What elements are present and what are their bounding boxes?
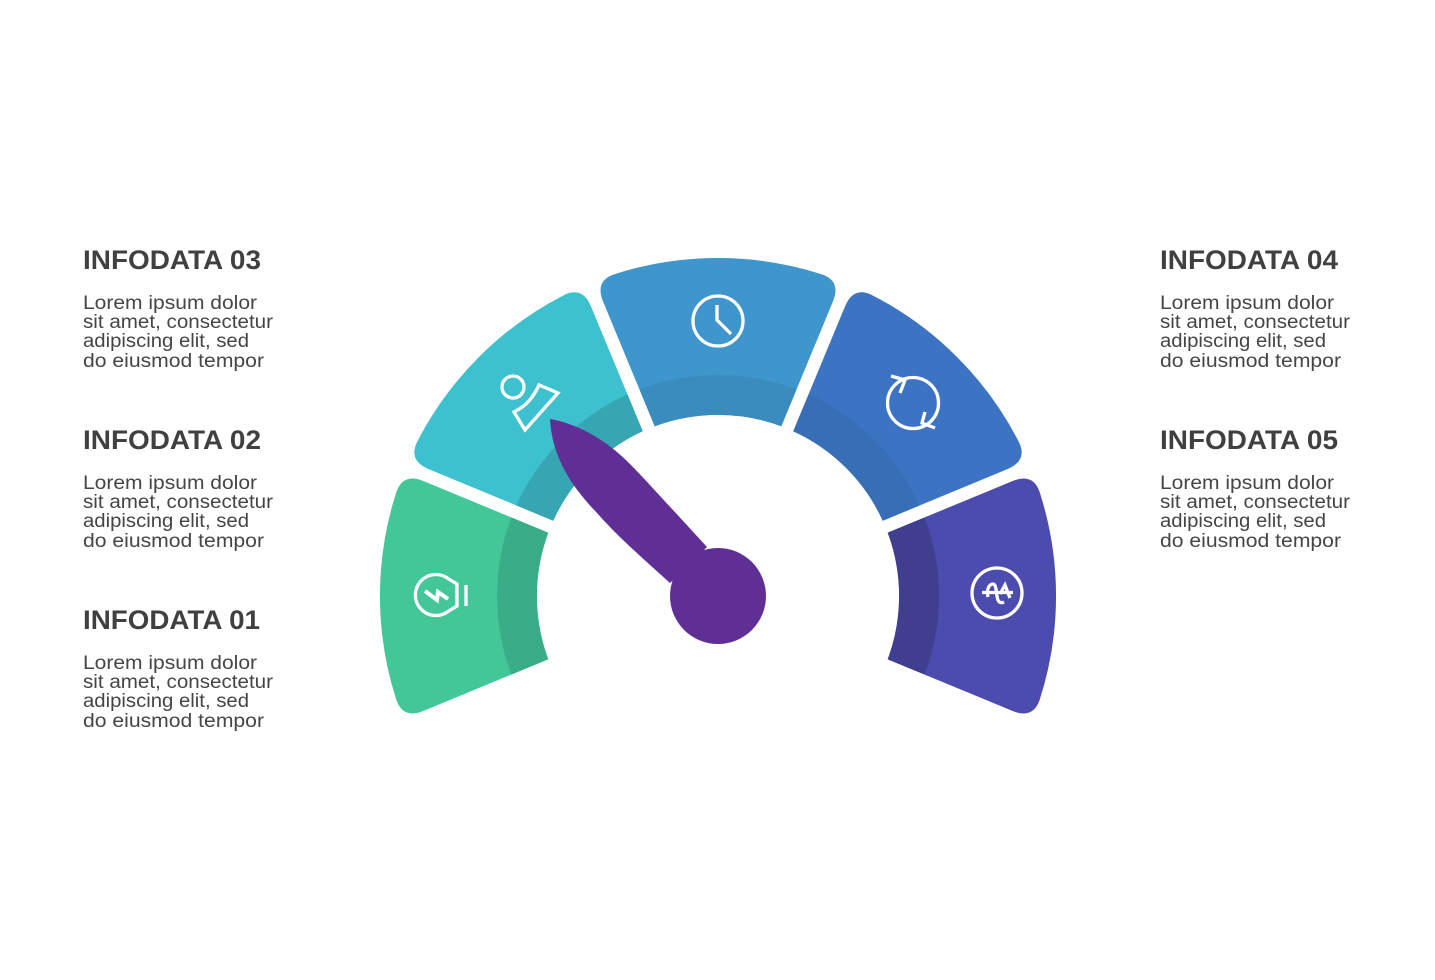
icon: person xyxy=(502,376,558,430)
gauge segment 2: teal xyxy=(396,274,681,559)
text block: infodata 01: adipiscing elit, sed xyxy=(83,691,249,712)
text block: infodata 05: sit amet, consectetur xyxy=(1160,492,1351,513)
text block: infodata 02: sit amet, consectetur xyxy=(83,492,274,513)
text block: infodata 05: INFODATA 05 xyxy=(1160,425,1338,455)
text block: infodata 01: Lorem ipsum dolor xyxy=(83,653,258,674)
gauge segment 4: royal blue xyxy=(755,274,1040,559)
text block: infodata 01: do eiusmod tempor xyxy=(83,711,265,732)
text block: infodata 03: Lorem ipsum dolor xyxy=(83,293,258,314)
text block: infodata 04: sit amet, consectetur xyxy=(1160,312,1351,333)
text block: infodata 03: adipiscing elit, sed xyxy=(83,331,249,352)
text block: infodata 05: Lorem ipsum dolor xyxy=(1160,473,1335,494)
text block: infodata 04 xyxy=(1160,245,1351,372)
text block: infodata 02: adipiscing elit, sed xyxy=(83,511,249,532)
gauge segment 3: blue xyxy=(601,258,835,426)
text block: infodata 01: sit amet, consectetur xyxy=(83,672,274,693)
text block: infodata 02: Lorem ipsum dolor xyxy=(83,473,258,494)
needle xyxy=(550,419,766,644)
text block: infodata 03: do eiusmod tempor xyxy=(83,351,265,372)
text block: infodata 02: INFODATA 02 xyxy=(83,425,261,455)
icon: refresh arrows xyxy=(888,376,938,428)
text block: infodata 04: INFODATA 04 xyxy=(1160,245,1338,275)
text block: infodata 03 xyxy=(83,245,274,372)
text block: infodata 03: sit amet, consectetur xyxy=(83,312,274,333)
text block: infodata 04: do eiusmod tempor xyxy=(1160,351,1342,372)
text block: infodata 05 xyxy=(1160,425,1351,552)
icon: clock xyxy=(693,296,743,346)
text block: infodata 02: do eiusmod tempor xyxy=(83,531,265,552)
text block: infodata 04: adipiscing elit, sed xyxy=(1160,331,1326,352)
text block: infodata 04: Lorem ipsum dolor xyxy=(1160,293,1335,314)
icon: light bulb xyxy=(415,574,466,616)
icon: dollar coin xyxy=(972,568,1022,618)
text block: infodata 02 xyxy=(83,425,274,552)
text block: infodata 05: adipiscing elit, sed xyxy=(1160,511,1326,532)
text block: infodata 01: INFODATA 01 xyxy=(83,605,260,635)
gauge segment 5: indigo xyxy=(888,479,1056,713)
text block: infodata 01 xyxy=(83,605,274,732)
text block: infodata 03: INFODATA 03 xyxy=(83,245,261,275)
text block: infodata 05: do eiusmod tempor xyxy=(1160,531,1342,552)
gauge segment 1: green xyxy=(380,479,548,713)
